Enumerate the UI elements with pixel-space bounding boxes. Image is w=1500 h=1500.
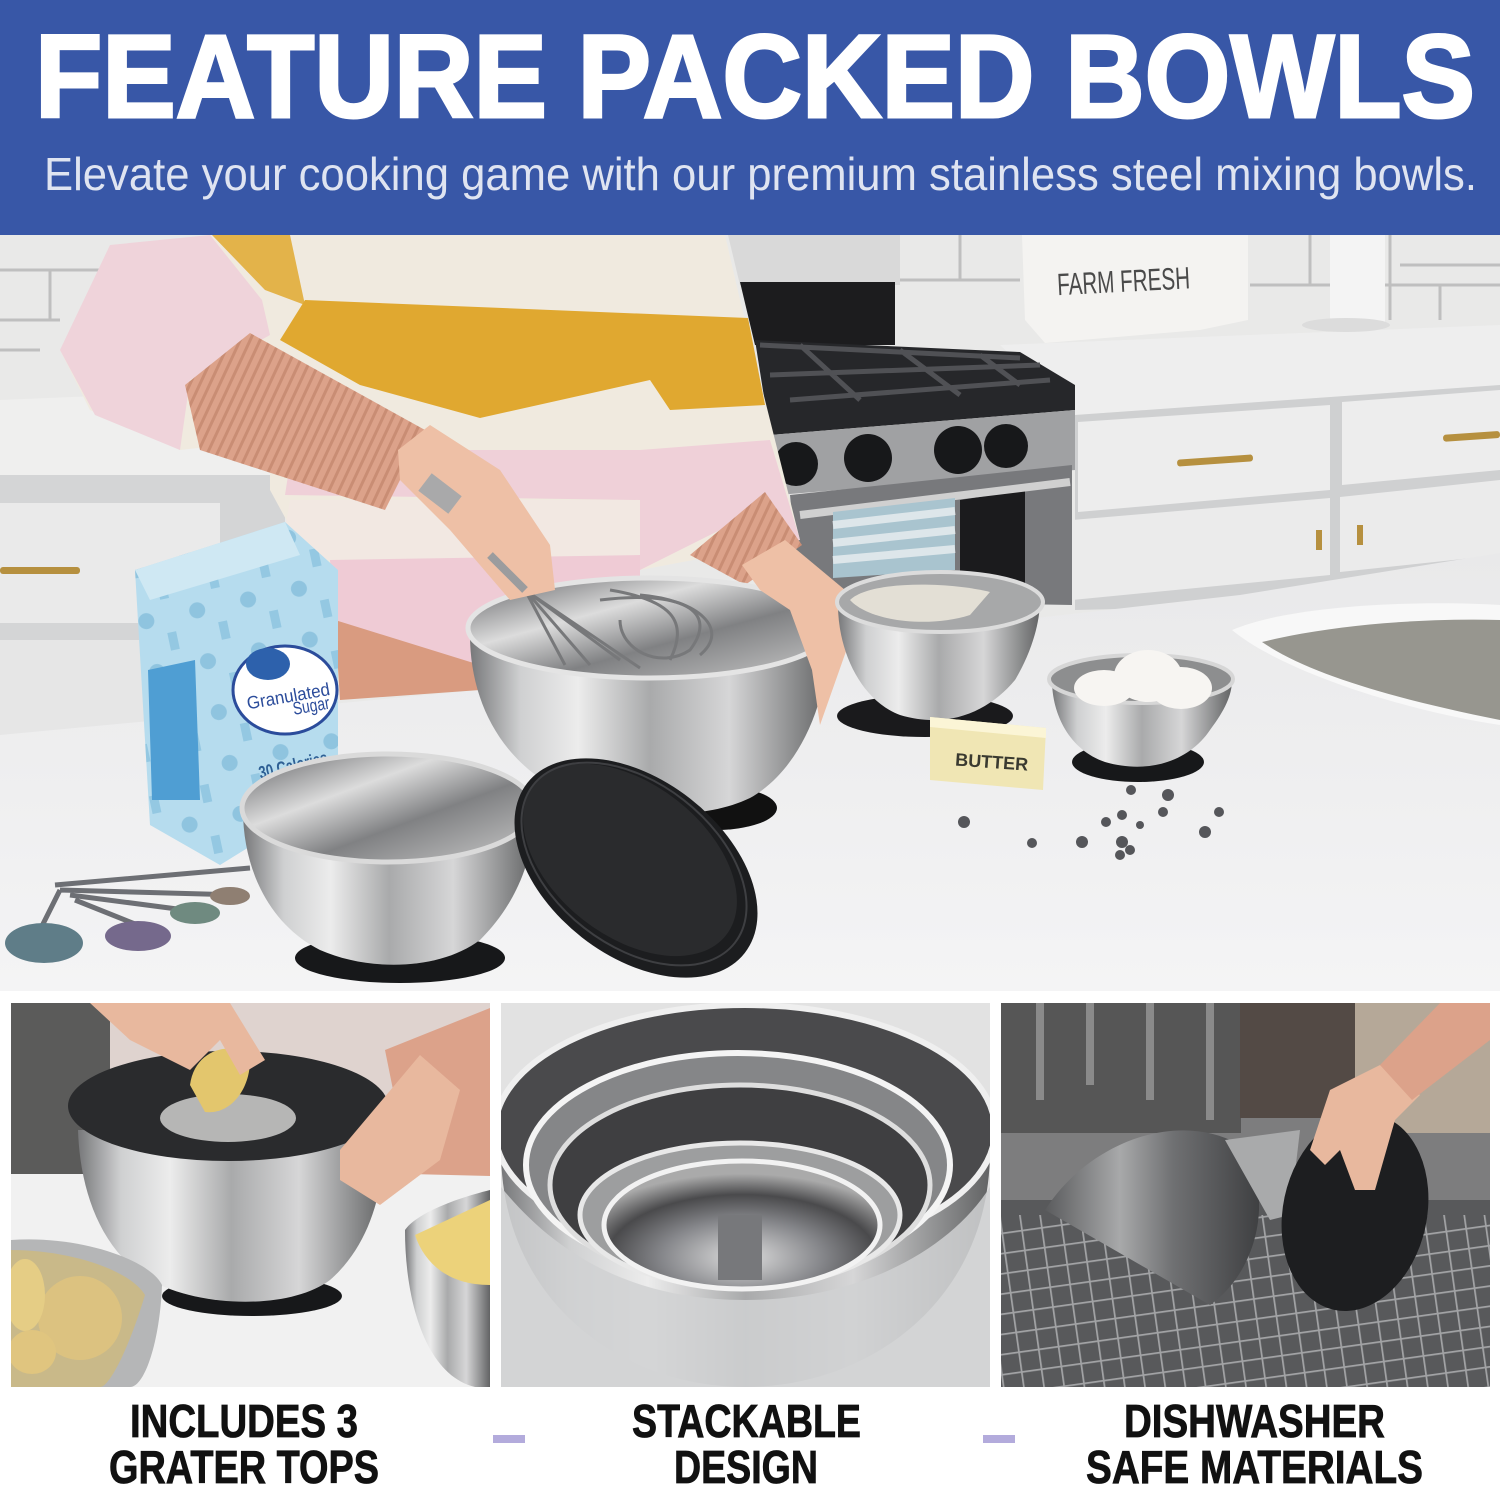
right hand: [742, 540, 850, 725]
black grater lid: [1282, 1122, 1428, 1311]
caption: includes 3 grater tops: INCLUDES 3: [130, 1395, 358, 1447]
eggs: [1074, 650, 1212, 709]
dish towel: [833, 498, 955, 578]
front bowl with black base: [242, 754, 535, 983]
caption: stackable design: [632, 1395, 861, 1493]
sugar bag: 30 Calories: [257, 748, 330, 783]
panel: grater tops photo: [5, 1003, 490, 1387]
gas range: [728, 235, 1075, 605]
whisking hand: [398, 425, 555, 600]
grater lid: [68, 1051, 388, 1161]
potato and hands: [190, 1049, 250, 1112]
steel bowl: [162, 1284, 342, 1316]
potato bowl: [5, 1239, 162, 1387]
cheese bowl: [405, 1190, 490, 1387]
caption: dishwasher safe materials: SAFE MATERIALS: [1086, 1441, 1423, 1493]
sign: farm fresh: FARM FRESH: [1056, 260, 1191, 302]
kitchen wall and cabinets: [0, 235, 1500, 735]
chocolate chips: [958, 785, 1224, 860]
butter stick: [930, 717, 1046, 790]
measuring spoons: [5, 868, 250, 963]
caption: includes 3 grater tops: [109, 1395, 379, 1493]
butter stick: BUTTER: [955, 750, 1029, 775]
person in striped sweater: [60, 235, 802, 700]
rack: [1001, 1215, 1490, 1387]
hero photo: kitchen scene: [0, 235, 1500, 1022]
divider: [983, 1435, 1015, 1443]
sugar bag: [135, 522, 338, 865]
dishwasher interior: [1001, 1003, 1241, 1133]
hand with sleeve: [1310, 1065, 1420, 1190]
small bowl with eggs: [1049, 650, 1233, 782]
divider: [493, 1435, 525, 1443]
sugar bag: Granulated: [245, 679, 331, 713]
nested bowls: [501, 1150, 990, 1387]
caption: dishwasher safe materials: [1086, 1395, 1423, 1493]
tilted bowl: [1045, 1130, 1259, 1305]
large steel bowl with whisk: [468, 578, 832, 830]
panel: dishwasher photo: [1001, 1003, 1490, 1387]
caption: includes 3 grater tops: GRATER TOPS: [109, 1441, 379, 1493]
paper towel holder: [1302, 235, 1390, 332]
medium bowl with batter: [837, 572, 1043, 737]
sign: farm fresh: [1022, 235, 1248, 343]
whisk: [525, 590, 712, 668]
kitchen sink: [1232, 603, 1500, 725]
counter top: [0, 553, 1500, 991]
header banner: [0, 0, 1500, 235]
kitchen background: [11, 1003, 111, 1174]
caption: stackable design: DESIGN: [674, 1441, 818, 1493]
sugar bag: Sugar: [291, 693, 331, 719]
caption: stackable design: STACKABLE: [632, 1395, 861, 1447]
caption: dishwasher safe materials: DISHWASHER: [1124, 1395, 1385, 1447]
black lid: [514, 758, 758, 978]
panel: stackable design photo: [495, 1003, 995, 1387]
